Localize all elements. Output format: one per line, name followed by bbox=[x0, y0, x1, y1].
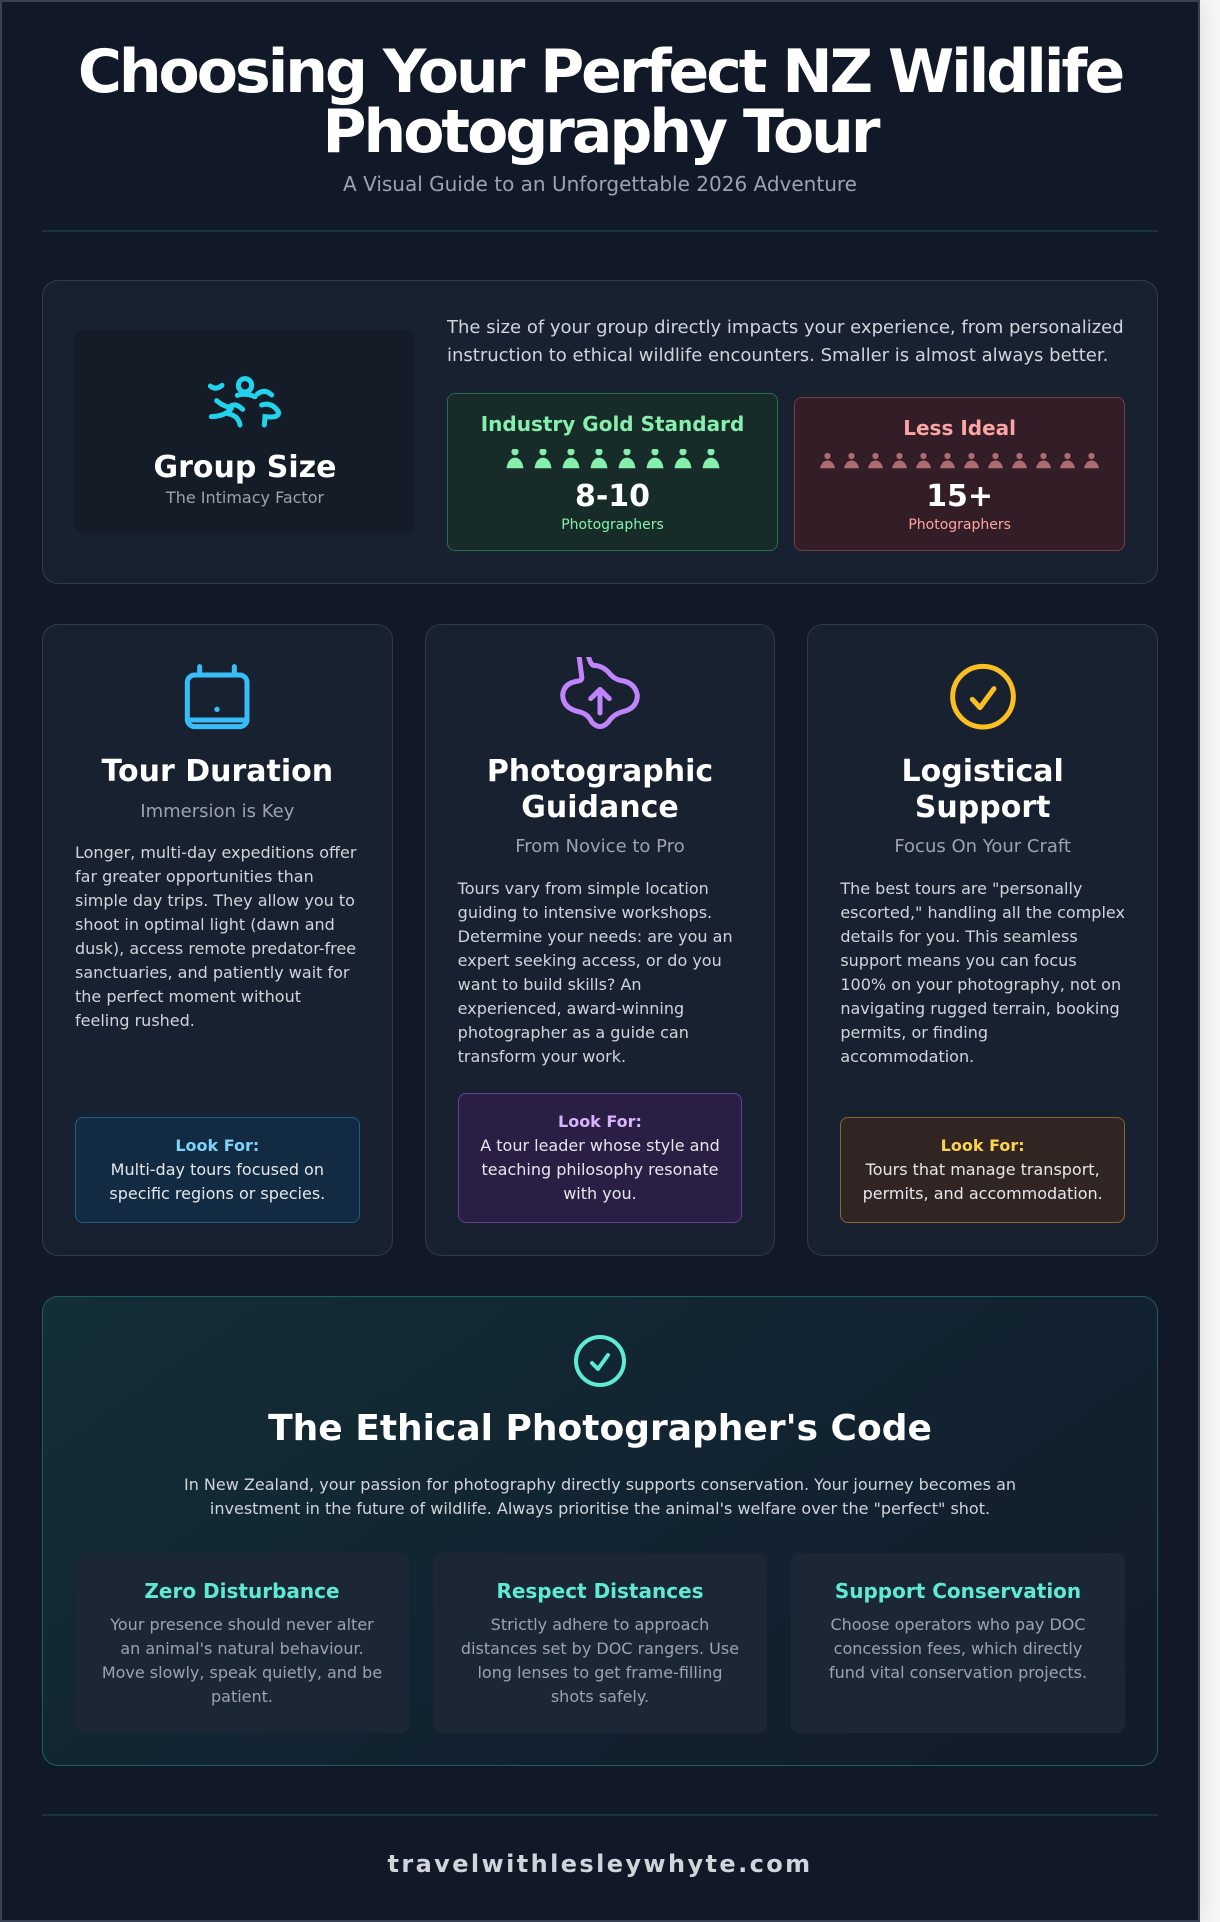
intro text: investment in the future of wildlife. Always prioritise the animal's welfare over the "perfect" shot. bbox=[210, 1499, 990, 1518]
principle text bbox=[102, 1615, 382, 1706]
callout: look for bbox=[840, 1117, 1125, 1223]
icon: group of people bbox=[208, 376, 281, 428]
heading: photographic guidance: Photographic bbox=[487, 754, 713, 789]
callout text bbox=[863, 1136, 1103, 1203]
intro text: The size of your group directly impacts your experience, from personalized bbox=[447, 317, 1124, 338]
body text: navigating rugged terrain, booking bbox=[840, 999, 1120, 1018]
principle heading: Respect Distances bbox=[496, 1579, 704, 1603]
principle: zero disturbance bbox=[75, 1553, 409, 1733]
caption: photographers: Photographers bbox=[561, 517, 664, 533]
heading: photographic guidance: Guidance bbox=[521, 790, 679, 825]
callout: look for bbox=[75, 1117, 360, 1223]
caption: photographers: Photographers bbox=[908, 517, 1011, 533]
principle: support conservation bbox=[791, 1553, 1125, 1733]
callout text: A tour leader whose style and bbox=[480, 1136, 720, 1155]
body text: far greater opportunities than bbox=[75, 867, 314, 886]
body text: photographer as a guide can bbox=[458, 1023, 689, 1042]
body text: experienced, award-winning bbox=[458, 999, 684, 1018]
principle text: shots safely. bbox=[551, 1687, 649, 1706]
body text: simple day trips. They allow you to bbox=[75, 891, 355, 910]
callout: gold standard bbox=[447, 393, 778, 551]
body text: permits, or finding bbox=[840, 1023, 988, 1042]
heading: ethical code: The Ethical Photographer's Code bbox=[268, 1408, 932, 1449]
body text: The best tours are "personally bbox=[840, 879, 1082, 898]
intro text bbox=[184, 1475, 1016, 1518]
body text: the perfect moment without bbox=[75, 987, 301, 1006]
callout text: Look For: bbox=[941, 1136, 1025, 1155]
panel: photographic guidance bbox=[425, 624, 775, 1256]
principle text: patient. bbox=[211, 1687, 273, 1706]
body text: want to build skills? An bbox=[458, 975, 642, 994]
body text: transform your work. bbox=[458, 1047, 626, 1066]
subheading: immersion is key: Immersion is Key bbox=[140, 801, 294, 822]
body text: 100% on your photography, not on bbox=[840, 975, 1121, 994]
heading: logistical support: Support bbox=[915, 790, 1050, 825]
principle text: Your presence should never alter bbox=[110, 1615, 374, 1634]
heading: logistical support bbox=[902, 754, 1064, 825]
icon: cloud upload bbox=[560, 657, 640, 729]
principle text: Strictly adhere to approach bbox=[491, 1615, 709, 1634]
heading: photographic guidance bbox=[487, 754, 713, 825]
number: 8-10: 8-10 bbox=[575, 479, 650, 514]
callout text: Tours that manage transport, bbox=[866, 1160, 1100, 1179]
principle text: Move slowly, speak quietly, and be bbox=[102, 1663, 382, 1682]
callout text: permits, and accommodation. bbox=[863, 1184, 1103, 1203]
subheading: from novice to pro: From Novice to Pro bbox=[515, 836, 685, 857]
panel: tour duration bbox=[42, 624, 393, 1256]
body text bbox=[458, 879, 733, 1066]
icons: fifteen plus people bbox=[820, 452, 1099, 468]
footer website: travelwithlesleywhyte.com bbox=[387, 1850, 813, 1878]
body text bbox=[840, 879, 1125, 1066]
callout text: with you. bbox=[563, 1184, 637, 1203]
subheading: focus on your craft: Focus On Your Craft bbox=[894, 836, 1071, 857]
number: 15+: 15+ bbox=[926, 479, 993, 514]
principle text: an animal's natural behaviour. bbox=[120, 1639, 364, 1658]
subtitle: A Visual Guide to an Unforgettable 2026 Adventure bbox=[343, 172, 857, 196]
callout text: Multi-day tours focused on bbox=[111, 1160, 324, 1179]
principle text: distances set by DOC rangers. Use bbox=[461, 1639, 739, 1658]
body text: escorted," handling all the complex bbox=[840, 903, 1125, 922]
callout: look for bbox=[458, 1093, 742, 1223]
callout text: teaching philosophy resonate bbox=[482, 1160, 718, 1179]
callout text: Look For: bbox=[558, 1112, 642, 1131]
principle text: Choose operators who pay DOC bbox=[830, 1615, 1086, 1634]
body text: feeling rushed. bbox=[75, 1011, 195, 1030]
panel: ethical photographer's code bbox=[42, 1296, 1158, 1766]
body text: shoot in optimal light (dawn and bbox=[75, 915, 335, 934]
icon: check circle bbox=[950, 664, 1016, 730]
icons: eight people bbox=[506, 449, 720, 468]
body text: expert seeking access, or do you bbox=[458, 951, 722, 970]
title: Photography Tour bbox=[322, 97, 878, 167]
label: less ideal: Less Ideal bbox=[903, 416, 1016, 440]
intro text bbox=[446, 317, 1124, 366]
icon: calendar bbox=[184, 664, 250, 730]
subheading: intimacy factor: The Intimacy Factor bbox=[166, 488, 324, 507]
callout text: specific regions or species. bbox=[109, 1184, 325, 1203]
heading: tour duration: Tour Duration bbox=[102, 754, 333, 789]
title bbox=[78, 37, 1122, 167]
principle text: fund vital conservation projects. bbox=[829, 1663, 1087, 1682]
principle text: long lenses to get frame-filling bbox=[477, 1663, 723, 1682]
body text: sanctuaries, and patiently wait for bbox=[75, 963, 350, 982]
body text bbox=[75, 843, 356, 1030]
principle text bbox=[461, 1615, 739, 1706]
heading: group size: Group Size bbox=[153, 450, 336, 485]
body text: accommodation. bbox=[840, 1047, 974, 1066]
icon: check circle bbox=[574, 1335, 626, 1387]
body text: details for you. This seamless bbox=[840, 927, 1078, 946]
callout text bbox=[109, 1136, 325, 1203]
intro text: instruction to ethical wildlife encounters. Smaller is almost always better. bbox=[447, 345, 1108, 366]
intro text: In New Zealand, your passion for photography directly supports conservation. Your journey becomes an bbox=[184, 1475, 1016, 1494]
body text: Longer, multi-day expeditions offer bbox=[75, 843, 356, 862]
callout text bbox=[480, 1112, 720, 1203]
principle heading: Zero Disturbance bbox=[144, 1579, 340, 1603]
principle: respect distances bbox=[433, 1553, 767, 1733]
panel: logistical support bbox=[807, 624, 1158, 1256]
heading: logistical support: Logistical bbox=[902, 754, 1064, 789]
callout text: Look For: bbox=[175, 1136, 259, 1155]
title: Choosing Your Perfect NZ Wildlife bbox=[78, 37, 1122, 107]
body text: Tours vary from simple location bbox=[458, 879, 709, 898]
panel: group size bbox=[42, 280, 1158, 584]
group size heading block bbox=[75, 330, 415, 533]
body text: Determine your needs: are you an bbox=[458, 927, 733, 946]
body text: dusk), access remote predator-free bbox=[75, 939, 356, 958]
principle heading: Support Conservation bbox=[835, 1579, 1081, 1603]
body text: guiding to intensive workshops. bbox=[458, 903, 712, 922]
callout: less ideal bbox=[794, 397, 1125, 551]
principle text bbox=[829, 1615, 1087, 1682]
principle text: concession fees, which directly bbox=[834, 1639, 1082, 1658]
body text: support means you can focus bbox=[840, 951, 1077, 970]
label: industry gold standard: Industry Gold Standard bbox=[481, 412, 744, 436]
